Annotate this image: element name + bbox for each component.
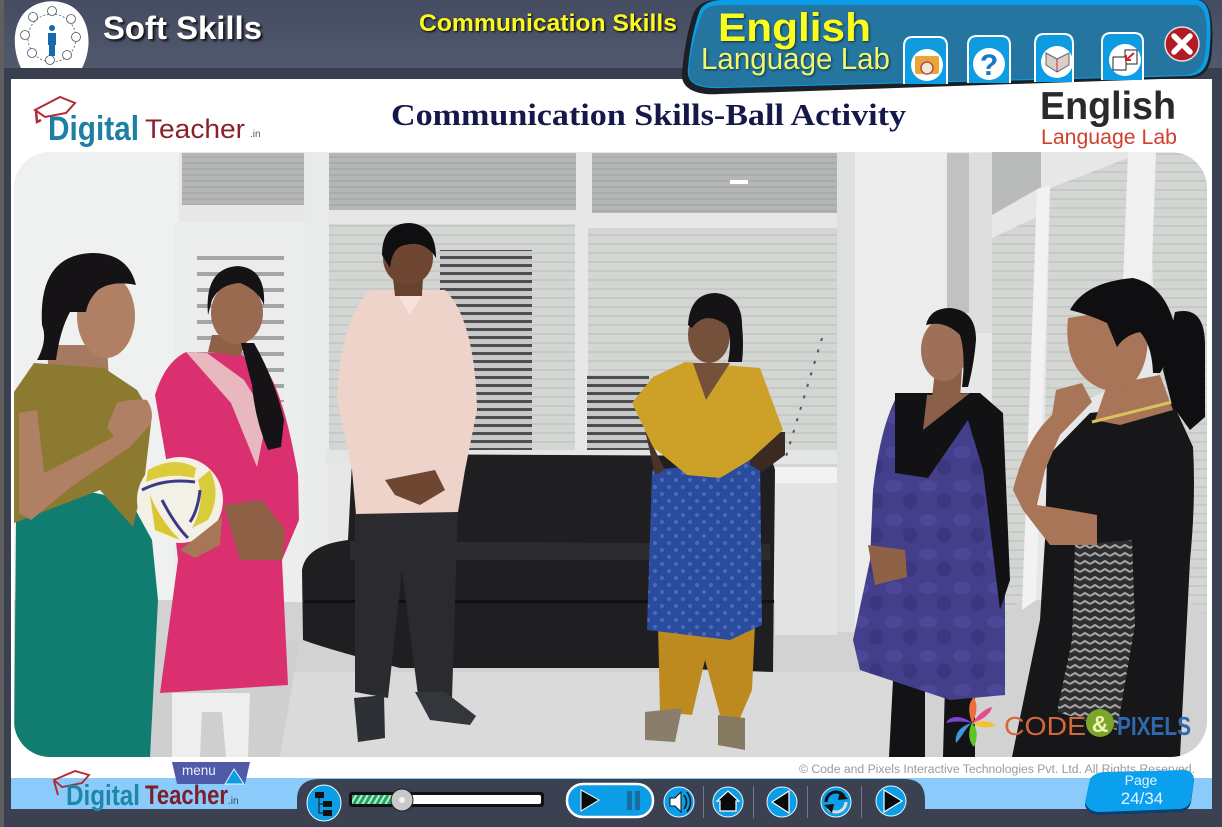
person: woman in pink kurta <box>155 266 299 757</box>
menu tab <box>172 762 250 784</box>
button: home <box>713 787 743 817</box>
button: previous <box>767 787 797 817</box>
logo: Digital Teacher bottom <box>54 771 239 812</box>
heading: Soft Skills: Soft Skills <box>103 10 262 46</box>
label: English: English <box>718 6 871 50</box>
button: resize window <box>1102 33 1143 80</box>
player control bar <box>297 779 925 827</box>
button: open book <box>1035 34 1073 82</box>
button: next <box>876 786 906 816</box>
bottom light blue strip <box>11 778 1212 809</box>
black sofa <box>302 454 775 672</box>
person: man in pale shirt <box>337 223 477 742</box>
logo: Digital Teacher top: Digital <box>48 110 139 148</box>
button: replay <box>821 787 851 817</box>
logo: Digital Teacher top: Teacher <box>145 114 245 144</box>
watermark: code and pixels: & <box>1092 711 1108 737</box>
person: woman in yellow scarf and blue kurta <box>632 293 785 750</box>
button: sound <box>664 787 694 817</box>
button: help: ? <box>980 49 998 82</box>
button: close <box>1165 27 1199 61</box>
page counter: 24/34 <box>1121 789 1163 808</box>
play and pause buttons <box>567 784 653 817</box>
logo: English Language Lab: Language Lab <box>1041 126 1177 149</box>
logo: Digital Teacher top <box>35 97 261 148</box>
button: history folder <box>904 37 947 84</box>
copyright note: © Code and Pixels Interactive Technologies Pvt. Ltd. All Rights Reserved. <box>799 764 1195 776</box>
room wall and floor <box>14 152 1207 757</box>
heading: Communication Skills: Communication Skills <box>419 10 677 37</box>
pillar and right windows <box>837 152 1207 632</box>
icon: soft skills circular emblem <box>15 1 89 68</box>
person: woman with ball, teal dress <box>14 253 158 757</box>
logo: Digital Teacher bottom: Digital <box>66 780 140 812</box>
page counter <box>1085 770 1194 815</box>
person: woman in purple kurta <box>853 308 1010 757</box>
person: woman in black <box>1012 278 1205 757</box>
progress slider <box>349 789 544 811</box>
title: Communication Skills-Ball Activity <box>391 97 907 132</box>
hand under ball <box>180 517 222 558</box>
office windows with blinds <box>174 152 856 635</box>
page counter: Page <box>1125 772 1158 788</box>
logo: Digital Teacher bottom: .in <box>228 796 239 807</box>
panel: English Language Lab header tab <box>682 0 1212 94</box>
logo: English Language Lab: English <box>1040 85 1176 128</box>
volleyball <box>137 457 223 543</box>
watermark: code and pixels: PIXELS <box>1117 711 1191 741</box>
button: help <box>968 36 1010 83</box>
watermark: code and pixels <box>946 697 1191 747</box>
label: Language Lab: Language Lab <box>701 41 890 76</box>
logo: English Language Lab <box>1040 85 1177 149</box>
photo: students in a ball activity <box>14 152 1207 757</box>
logo: Digital Teacher bottom: Teacher <box>145 780 228 810</box>
menu tab: menu <box>182 763 216 778</box>
watermark: code and pixels: CODE <box>1004 711 1086 741</box>
button: outline tree <box>307 785 341 821</box>
logo: Digital Teacher top: .in <box>250 129 261 140</box>
